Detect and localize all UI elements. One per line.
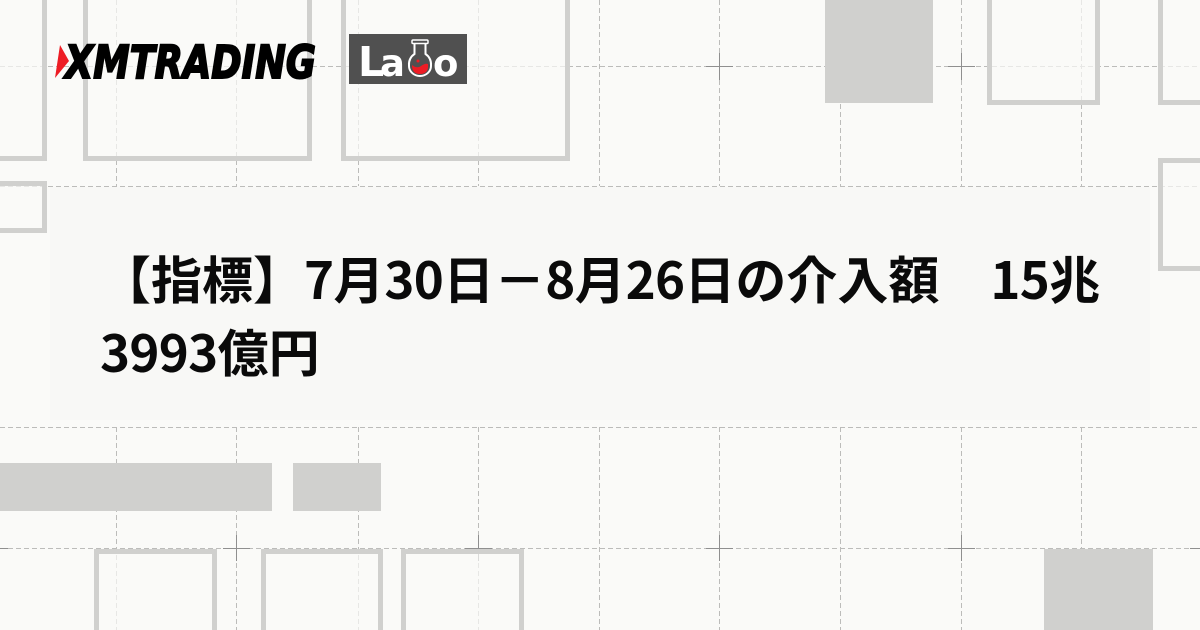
logo: Lab bbox=[349, 34, 467, 86]
title: 3993億円 bbox=[100, 313, 320, 387]
icon: flask bbox=[409, 40, 431, 76]
title bbox=[100, 240, 1100, 387]
central title panel bbox=[50, 187, 1150, 420]
logo: Lab: L bbox=[358, 38, 384, 86]
logos bbox=[55, 34, 467, 89]
logo: Lab: o bbox=[433, 42, 458, 85]
logo: Lab: a bbox=[380, 42, 405, 85]
logo: XMTRADING: XMTRADING bbox=[63, 36, 316, 89]
title: 【指標】7月30日－8月26日の介入額 15兆 bbox=[100, 240, 1100, 314]
